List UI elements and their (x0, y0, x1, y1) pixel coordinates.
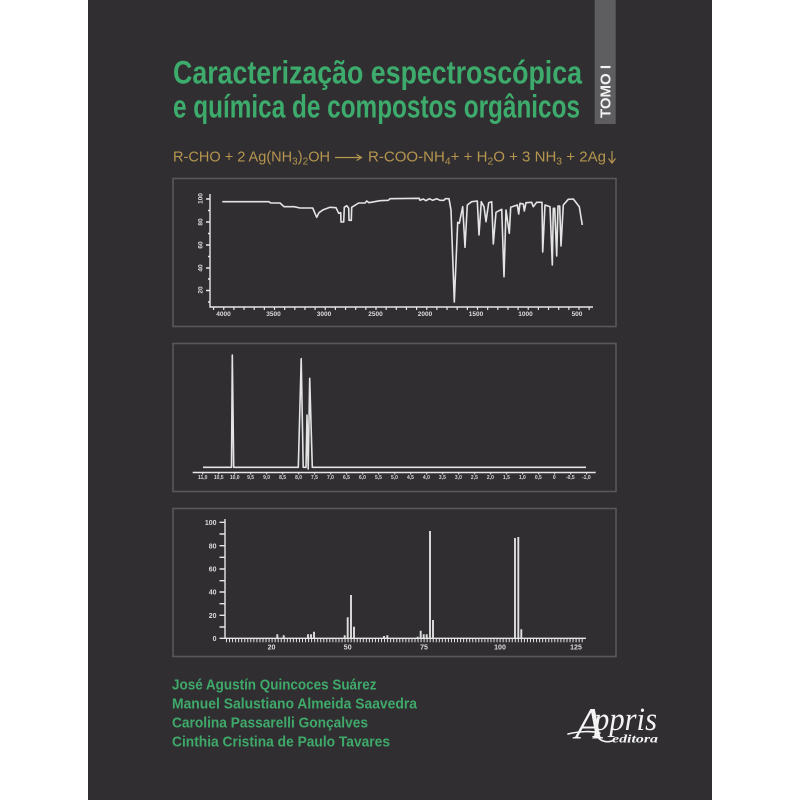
title: e química de compostos orgânicos (173, 88, 580, 124)
title (173, 54, 583, 124)
NMR axis labels: 9,0 (263, 475, 270, 481)
IR axis labels: 4000 (216, 311, 231, 318)
IR axis labels: 1000 (518, 311, 533, 318)
logo: Appris editora: ppris (592, 702, 657, 738)
NMR axis labels: -0,5 (566, 475, 575, 481)
IR axis labels: 2500 (368, 311, 383, 318)
title: Caracterização espectroscópica (173, 54, 583, 90)
IR axis labels: 3000 (317, 311, 332, 318)
chemical equation: 2 (303, 156, 309, 168)
NMR axis labels: 11,0 (198, 475, 208, 481)
NMR trace (203, 355, 586, 469)
MS axis labels: 60 (209, 566, 217, 574)
NMR axis labels: 2,5 (471, 475, 478, 481)
NMR axis labels: 7,0 (327, 475, 334, 481)
MS axis labels: 40 (209, 590, 217, 596)
NMR axis labels: 10,0 (230, 475, 240, 481)
NMR axis labels: 5,0 (391, 475, 398, 481)
logo: Appris editora: editora (612, 732, 658, 746)
MS axis labels: 20 (209, 613, 217, 620)
logo: Appris editora (568, 699, 658, 748)
chemical equation: OH (308, 150, 330, 166)
MS axis labels: 100 (494, 644, 506, 652)
IR axis labels: 40 (198, 264, 204, 272)
panel: NMR spectrum (173, 344, 616, 492)
NMR axis labels: 6,0 (359, 475, 366, 481)
authors: Carolina Passarelli Gonçalves (172, 714, 368, 732)
IR axis labels: 3500 (266, 311, 281, 318)
chemical equation: 3 (292, 156, 298, 168)
IR axis labels: 80 (198, 218, 204, 226)
cover background (88, 0, 712, 800)
chemical equation: R-CHO + 2 Ag(NH (173, 150, 292, 166)
NMR axis labels: 5,5 (375, 475, 382, 481)
NMR axis labels: -1,0 (582, 475, 591, 481)
IR axis labels: 20 (198, 286, 204, 294)
IR axis labels: 60 (198, 241, 204, 249)
MS axes (220, 519, 586, 640)
chemical equation: ) (298, 150, 303, 166)
NMR axis labels (198, 475, 591, 481)
MS axis labels: 50 (344, 644, 352, 652)
NMR axis labels: 10,5 (214, 475, 224, 481)
logo: Appris editora: A (572, 699, 604, 748)
volume tab: Tomo I: TOMO I (598, 65, 614, 118)
MS axis labels: 0 (213, 636, 217, 643)
IR axes (206, 194, 593, 308)
NMR axis labels: 0 (553, 475, 556, 481)
authors: Manuel Salustiano Almeida Saavedra (172, 696, 418, 712)
chemical equation: + 2Ag (562, 150, 606, 166)
chemical equation: O + 3 NH (493, 150, 556, 166)
MS axis labels: 20 (268, 644, 275, 652)
NMR axis labels: 8,0 (295, 475, 302, 481)
NMR axis labels: 3,5 (439, 475, 446, 481)
chemical equation: R-COO-NH (368, 150, 442, 166)
NMR axis labels: 8,5 (279, 475, 286, 481)
NMR axis labels: 7,5 (311, 475, 318, 481)
volume tab: Tomo I (595, 0, 616, 124)
IR trace (222, 198, 582, 302)
NMR axis labels: 4,5 (407, 475, 414, 481)
chemical equation: 3 (556, 156, 563, 168)
IR axis labels: 500 (572, 311, 583, 318)
panel: IR spectrum (173, 178, 616, 326)
NMR axis labels: 4,0 (423, 475, 430, 481)
NMR axis labels: 6,5 (343, 475, 350, 481)
MS axis labels (205, 520, 582, 652)
chemical equation: 4 (445, 156, 451, 168)
NMR axis labels: 1,0 (519, 475, 526, 481)
NMR axis labels: 3,0 (455, 475, 462, 481)
IR axis labels: 2000 (418, 311, 433, 318)
NMR axis labels: 9,5 (247, 475, 254, 481)
MS axis labels: 125 (570, 644, 582, 652)
MS axis labels: 100 (205, 520, 217, 527)
chemical equation (173, 150, 616, 168)
chemical equation: + + H (451, 150, 487, 166)
IR axis labels: 100 (198, 193, 204, 204)
MS peaks (277, 531, 521, 638)
authors: José Agustín Quincoces Suárez (172, 676, 376, 694)
IR axis labels: 1500 (469, 311, 484, 318)
NMR axis labels: 0,5 (535, 475, 542, 481)
authors (172, 676, 418, 750)
NMR axis labels: 1,5 (503, 475, 510, 481)
MS axis labels: 75 (420, 644, 428, 652)
panel: mass spectrum (173, 508, 616, 656)
IR axis labels (198, 193, 583, 318)
MS axis labels: 80 (209, 544, 217, 550)
authors: Cinthia Cristina de Paulo Tavares (172, 734, 390, 750)
NMR axis (193, 472, 596, 474)
chemical equation: 2 (487, 156, 494, 168)
NMR axis labels: 2,0 (487, 475, 494, 481)
